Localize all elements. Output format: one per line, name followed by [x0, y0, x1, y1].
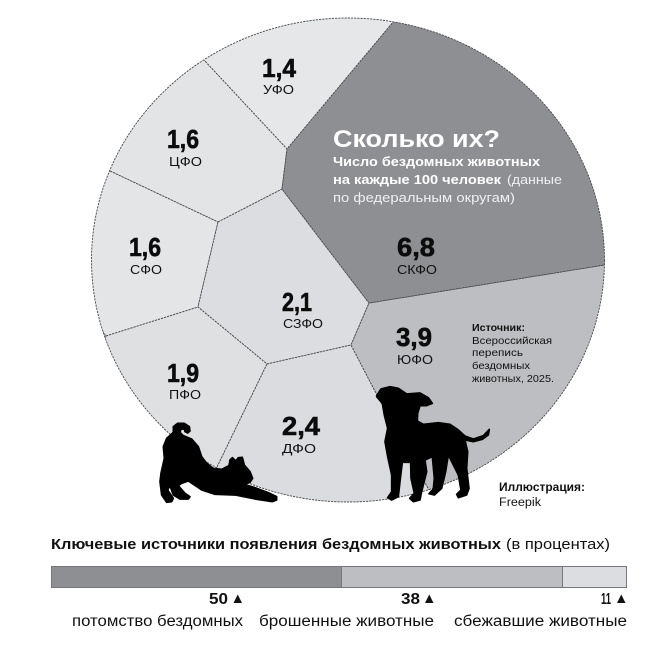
subheading text [333, 154, 562, 205]
value: СКФО: 6,8 [397, 232, 435, 262]
segment: СЗФО [198, 189, 369, 364]
value: ЮФО [396, 322, 433, 367]
value: УФО [262, 53, 296, 97]
heading: Сколько их?: Сколько их? [333, 126, 500, 153]
source note: Источник: [472, 322, 525, 334]
value: СЗФО [282, 287, 323, 331]
bar segment: сбежавшие [562, 566, 626, 588]
source note [472, 322, 554, 385]
heading: sources: (в процентах) [506, 536, 610, 553]
segment: ЦФО [110, 60, 287, 222]
value: ЮФО: 3,9 [396, 322, 432, 352]
value: СЗФО: 2,1 [282, 287, 312, 317]
value: ПФО: ПФО [169, 387, 201, 402]
value: СКФО: СКФО [397, 262, 437, 277]
value: СЗФО: СЗФО [283, 316, 323, 331]
bar label: 11: сбежавшие животные [454, 613, 627, 630]
illustration credit: Freepik [499, 497, 541, 509]
bar label: 11 [454, 591, 627, 630]
bar label: 50: потомство бездомных [72, 613, 243, 630]
bar label: 11: 11 [601, 591, 611, 608]
source note: бездомных [472, 360, 531, 372]
value: ЦФО: 1,6 [167, 124, 199, 154]
stacked bar [52, 566, 626, 588]
bar label: 50: 50 [209, 591, 228, 608]
value: УФО: 1,4 [262, 53, 296, 83]
illustration credit [499, 482, 585, 509]
icon: cat silhouette [160, 423, 277, 502]
value: ДФО: 2,4 [282, 411, 321, 441]
value: ЮФО: ЮФО [397, 352, 433, 367]
value: СФО [129, 232, 162, 277]
segment: ПФО [105, 306, 267, 468]
bar label: 38: брошенные животные [259, 613, 434, 630]
value: ЦФО: ЦФО [169, 154, 202, 169]
source note: животных, 2025. [472, 373, 554, 385]
segment: СКФО [282, 22, 604, 304]
value: ЦФО [167, 124, 202, 169]
icon: dog silhouette [377, 387, 489, 502]
source note: перепись [472, 347, 524, 359]
value: СФО: СФО [130, 262, 162, 277]
value: ДФО: ДФО [282, 441, 316, 456]
segment: ЮФО [350, 265, 604, 490]
segment: ДФО [216, 344, 429, 502]
subheading text: (данные [507, 172, 562, 187]
bar label: 38: 38 [401, 591, 420, 608]
value: ДФО [282, 411, 321, 456]
subheading text: Число бездомных животных [333, 154, 541, 169]
chart: districts pie-voronoi [91, 18, 605, 502]
illustration credit: Иллюстрация: [499, 482, 585, 494]
value: СФО: 1,6 [129, 232, 161, 262]
bar segment: потомство [52, 566, 342, 588]
heading: sources: Ключевые источники появления бездомных животных [51, 536, 502, 553]
value: СКФО [397, 232, 437, 277]
source note: Всероссийская [472, 335, 552, 347]
bar label: 38 [259, 591, 434, 630]
bar segment: брошенные [342, 566, 562, 588]
value: УФО: УФО [263, 82, 294, 97]
subheading text: по федеральным округам) [333, 190, 515, 205]
subheading text: на каждые 100 человек [333, 172, 502, 187]
bar label: 50 [72, 591, 243, 630]
circle outline [92, 18, 604, 502]
segment: СФО [80, 171, 218, 336]
segment: УФО [204, 18, 392, 149]
value: ПФО: 1,9 [167, 358, 199, 388]
value: ПФО [167, 358, 201, 402]
